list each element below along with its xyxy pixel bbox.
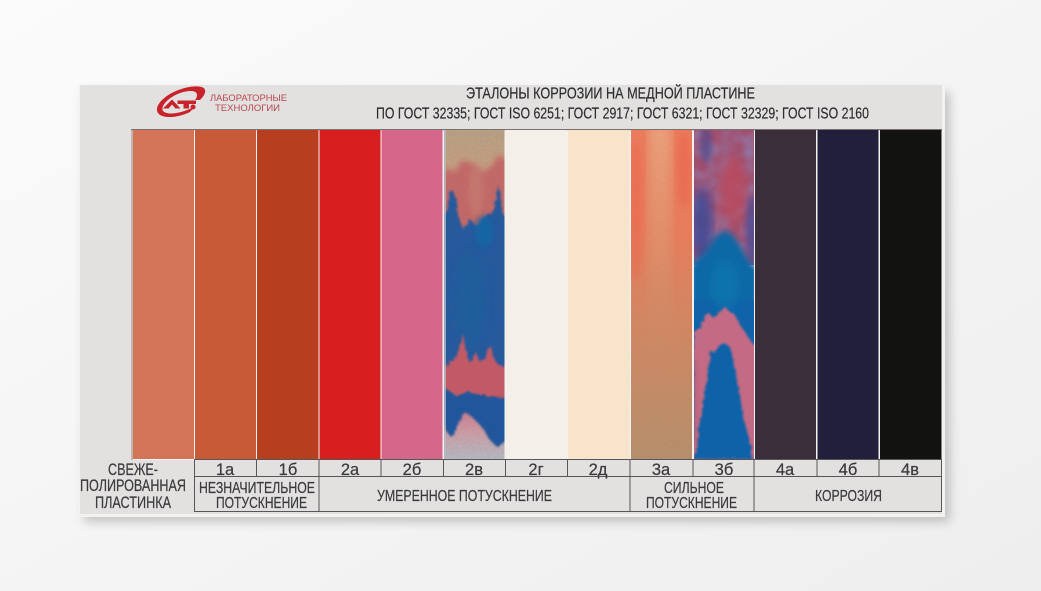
icon: red oval with AT [157,86,205,117]
logo text: ТЕХНОЛОГИИ [215,103,280,114]
grade codes: 2б [403,461,421,479]
grade codes: 1б [279,461,297,479]
label: corrosion: КОРРОЗИЯ [815,488,882,505]
grade codes: 2а [341,461,360,479]
label: moderate tarnish: УМЕРЕННОЕ ПОТУСКНЕНИЕ [377,488,552,505]
grade codes: 4а [776,461,795,479]
panel: corrosion standards card [79,85,945,517]
strip: 3a [630,125,692,459]
grade codes: 2в [465,461,483,479]
title [376,84,869,122]
grade codes: 4в [901,461,919,479]
label: fresh polished plate [80,461,186,512]
strip: fresh polished plate [133,130,194,459]
strip: 3b [694,130,754,459]
title: ЭТАЛОНЫ КОРРОЗИИ НА МЕДНОЙ ПЛАСТИНЕ [466,84,755,102]
grade codes: 3а [652,461,671,479]
label: strong tarnish: СИЛЬНОЕ [664,480,724,497]
logo text: ЛАБОРАТОРНЫЕ [210,93,287,104]
label: fresh polished plate: ПЛАСТИНКА [95,494,171,512]
label: slight tarnish: НЕЗНАЧИТЕЛЬНОЕ [199,480,315,497]
label: slight tarnish [199,480,315,512]
strip: 2b [382,130,442,459]
strip: 4v [880,130,942,459]
grade codes: 1а [216,461,235,479]
grade codes [216,461,919,479]
logo: Лаборатории технологии [157,86,287,117]
logo text [210,93,287,114]
strip: 1b [257,130,318,459]
label: fresh polished plate: ПОЛИРОВАННАЯ [80,477,186,495]
label: slight tarnish: ПОТУСКНЕНИЕ [216,495,307,512]
strip: 2a [320,130,380,459]
strip: 2d [568,130,630,459]
grade codes: 3б [715,461,733,479]
card shadow [84,92,950,522]
colour strips [131,125,942,460]
strip: 2v [444,130,504,459]
strip: 1a [195,130,256,459]
grade codes: 2г [528,461,544,479]
strip: 2g [506,130,567,459]
label: fresh polished plate: СВЕЖЕ- [108,461,158,479]
label: strong tarnish [646,480,737,512]
strip: 4a [755,130,816,459]
strip: 4b [818,130,878,459]
grade codes: 4б [839,461,857,479]
table: grade labels [194,460,942,512]
title: ПО ГОСТ 32335; ГОСТ ISO 6251; ГОСТ 2917; ГОСТ 6321; ГОСТ 32329; ГОСТ ISO 2160 [376,106,869,122]
grade codes: 2д [589,461,608,479]
label: strong tarnish: ПОТУСКНЕНИЕ [646,495,737,512]
